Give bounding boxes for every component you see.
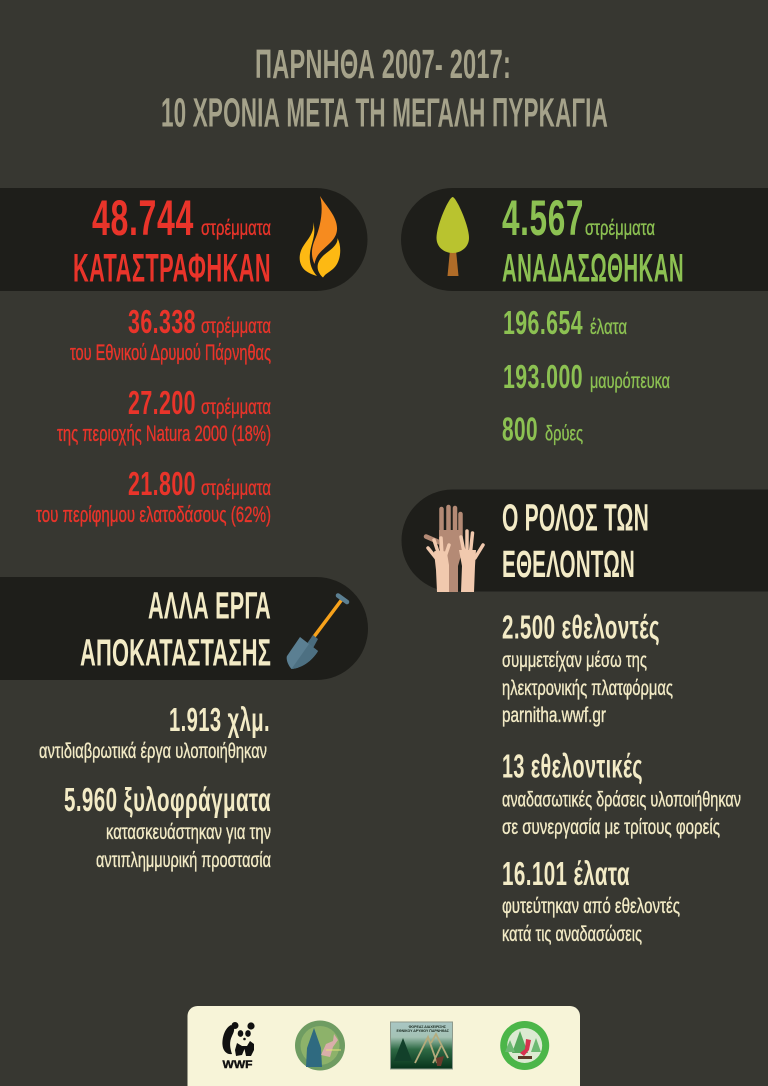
stat: black pines: μαυρόπευκα — [590, 370, 670, 393]
stat: natura: της περιοχής Natura 2000 (18%) — [57, 421, 271, 446]
panel: restoration header — [0, 577, 368, 680]
reforested headline: 4.567 — [502, 190, 584, 246]
stat: 2500 volunteers: 2.500 εθελοντές — [502, 608, 660, 646]
volunteers heading: ΕΘΕΛΟΝΤΩΝ — [502, 544, 635, 586]
panel: partner logos — [188, 1006, 580, 1086]
stat: natura — [57, 384, 271, 446]
stat: 16101 firs: φυτεύτηκαν από εθελοντές — [502, 895, 680, 918]
volunteer stats — [502, 608, 741, 946]
stat: fir forest: στρέμματα — [201, 477, 271, 500]
stat: natura: 27.200 — [128, 384, 196, 421]
restoration heading: ΑΠΟΚΑΤΑΣΤΑΣΗΣ — [80, 632, 271, 674]
restoration heading — [80, 586, 271, 674]
icon: shovel — [287, 596, 347, 669]
stat: log barriers: 5.960 ξυλοφράγματα — [64, 781, 271, 818]
logo: WWF panda — [222, 1022, 255, 1071]
panel: reforested header — [401, 188, 768, 291]
stat: 13 actions: 13 εθελοντικές — [502, 748, 643, 784]
logo: management body rectangle: ΕΘΝΙΚΟΥ ΔΡΥΜΟΥ ΠΑΡΝΗΘΑΣ — [397, 1029, 449, 1033]
destroyed headline — [73, 190, 271, 290]
stat: firs: 196.654 — [503, 304, 583, 341]
reforested headline — [502, 190, 684, 290]
stat: 2500 volunteers: ηλεκτρονικής πλατφόρμας — [502, 677, 673, 700]
restoration heading: ΑΛΛΑ ΕΡΓΑ — [148, 586, 271, 628]
stat: national park: του Εθνικού Δρυμού Πάρνηθας — [70, 340, 271, 365]
stat: firs: έλατα — [590, 316, 627, 339]
stat: national park — [70, 303, 271, 365]
logo: national park round badge — [295, 1020, 345, 1070]
logo: forestry association badge — [500, 1021, 549, 1070]
panel: volunteers header — [402, 490, 768, 592]
stat: oaks: δρύες — [545, 422, 583, 446]
icon: flame — [300, 196, 340, 278]
icon: raised hands — [426, 507, 483, 592]
stat: log barriers — [64, 781, 271, 872]
stat: anti-erosion works: 1.913 χλμ. — [169, 701, 270, 738]
stat: 16101 firs: κατά τις αναδασώσεις — [502, 923, 642, 946]
title — [161, 41, 608, 136]
stat: national park: στρέμματα — [201, 315, 271, 338]
stat: log barriers: κατασκευάστηκαν για την — [106, 821, 271, 844]
stat: fir forest: του περίφημου ελατοδάσους (62%) — [36, 502, 271, 527]
logo: WWF panda: WWF — [222, 1059, 253, 1071]
logo: management body rectangle — [390, 1022, 452, 1069]
destroyed stats — [36, 303, 271, 527]
stat: 2500 volunteers: συμμετείχαν μέσω της — [502, 649, 647, 672]
stat: 16101 firs: 16.101 έλατα — [502, 855, 630, 892]
destroyed headline: στρέμματα — [201, 217, 271, 240]
volunteers heading: Ο ΡΟΛΟΣ ΤΩΝ — [502, 498, 649, 540]
stat: fir forest: 21.800 — [128, 465, 196, 502]
reforested stats — [502, 304, 670, 448]
stat: 2500 volunteers — [502, 608, 673, 727]
stat: national park: 36.338 — [128, 303, 196, 340]
stat: 13 actions — [502, 748, 741, 839]
stat: 2500 volunteers: parnitha.wwf.gr — [502, 704, 606, 727]
logo: management body rectangle: ΦΟΡΕΑΣ ΔΙΑΧΕΙΡΙΣΗΣ — [409, 1025, 446, 1029]
stat: black pines: 193.000 — [503, 358, 583, 395]
destroyed headline: ΚΑΤΑΣΤΡΑΦΗΚΑΝ — [73, 246, 271, 290]
stat: oaks: 800 — [502, 410, 538, 448]
reforested headline: στρέμματα — [585, 217, 655, 240]
stat: natura: στρέμματα — [201, 396, 271, 419]
title: ΠΑΡΝΗΘΑ 2007- 2017: — [255, 41, 511, 87]
stat: 16101 firs — [502, 855, 680, 946]
stat: anti-erosion works — [39, 701, 270, 763]
stat: fir forest — [36, 465, 271, 527]
destroyed headline: 48.744 — [92, 190, 194, 246]
restoration stats — [39, 701, 271, 872]
icon: tree — [436, 197, 469, 276]
volunteers heading — [502, 498, 649, 586]
stat: log barriers: αντιπλημμυρική προστασία — [96, 849, 271, 872]
stat: anti-erosion works: αντιδιαβρωτικά έργα υλοποιήθηκαν — [39, 740, 267, 763]
panel: destroyed header — [0, 188, 368, 291]
